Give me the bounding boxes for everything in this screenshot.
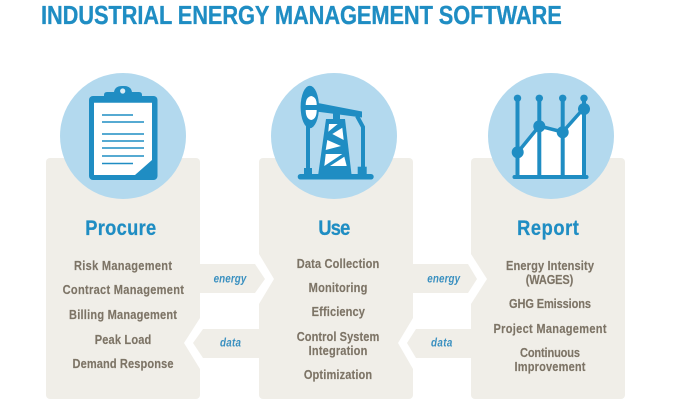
icon: oil pump xyxy=(271,73,397,199)
list: use items xyxy=(297,256,379,382)
list: procure items: Risk Management xyxy=(74,258,172,273)
list: report items: GHG Emissions xyxy=(509,296,591,311)
arrow: data use to procure: data xyxy=(220,337,241,350)
title: INDUSTRIAL ENERGY MANAGEMENT SOFTWARE xyxy=(41,1,562,30)
arrow: data report to use xyxy=(398,318,471,369)
list: procure items: Contract Management xyxy=(63,282,184,297)
list: use items: Optimization xyxy=(304,367,372,382)
arrow: energy procure to use xyxy=(200,254,274,304)
panel: procure xyxy=(46,158,200,399)
list: report items: Improvement xyxy=(515,359,585,374)
icon: clipboard xyxy=(60,73,186,199)
panel: use xyxy=(259,158,413,399)
list: report items xyxy=(493,258,607,374)
list: use items: Efficiency xyxy=(312,304,365,319)
list: report items: Continuous xyxy=(520,345,580,360)
list: procure items: Peak Load xyxy=(95,332,151,347)
panel: report xyxy=(471,158,625,399)
arrow: energy use to report xyxy=(413,254,487,304)
list: use items: Integration xyxy=(309,343,367,358)
list: procure items: Billing Management xyxy=(69,307,177,322)
arrow: energy procure to use: energy xyxy=(214,273,247,286)
arrow: energy use to report: energy xyxy=(427,273,461,286)
heading: report: Report xyxy=(517,217,579,240)
arrow: data use to procure xyxy=(184,318,259,369)
list: report items: Project Management xyxy=(493,321,607,336)
list: procure items xyxy=(63,258,184,371)
heading: use: Use xyxy=(318,217,350,240)
heading: procure: Procure xyxy=(85,217,156,240)
icon: line chart xyxy=(488,73,614,199)
list: procure items: Demand Response xyxy=(73,356,174,371)
list: report items: (WAGES) xyxy=(526,272,573,287)
arrow: data report to use: data xyxy=(431,337,452,350)
list: use items: Data Collection xyxy=(297,256,379,271)
list: use items: Monitoring xyxy=(309,280,367,295)
list: use items: Control System xyxy=(297,329,379,344)
list: report items: Energy Intensity xyxy=(506,258,594,273)
